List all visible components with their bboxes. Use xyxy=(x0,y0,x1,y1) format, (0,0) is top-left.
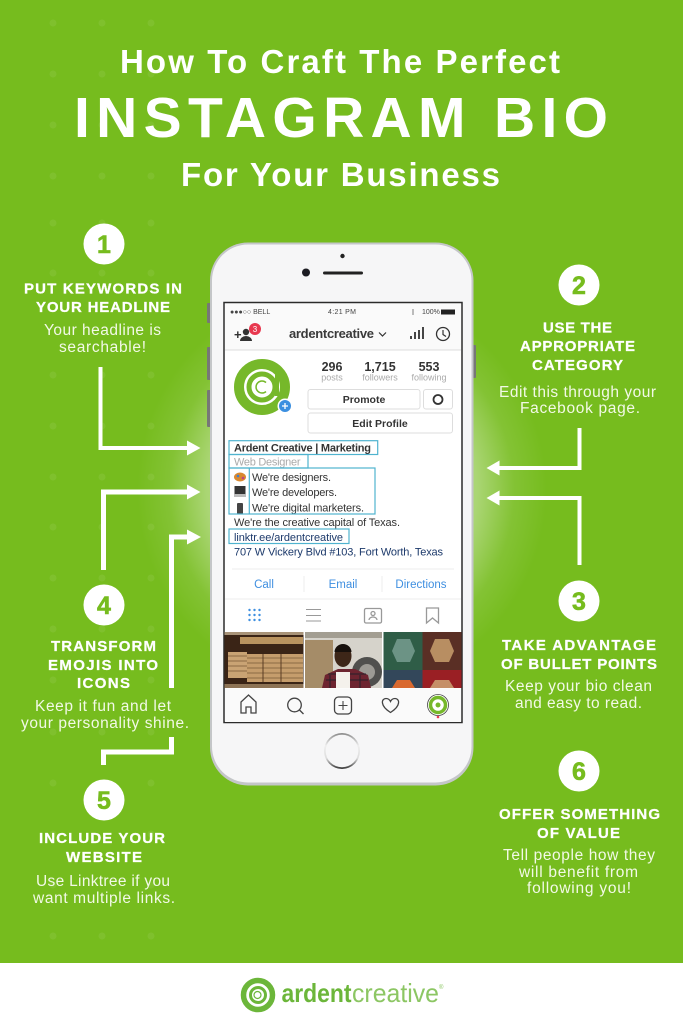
step 1: keywords: Your headline is xyxy=(44,322,161,339)
step 2: category: Facebook page. xyxy=(520,400,640,417)
step 6: value: 6 xyxy=(572,758,586,786)
callout boxes xyxy=(229,441,378,544)
bio text: Web Designer xyxy=(234,456,301,468)
step 5: website xyxy=(32,780,175,907)
logo mark xyxy=(244,980,272,1010)
contact row: Directions xyxy=(395,579,447,591)
bio text xyxy=(234,442,444,558)
logo: creative xyxy=(352,978,439,1008)
logo wordmark: ardent xyxy=(282,978,352,1008)
step 5: website: Use Linktree if you xyxy=(36,873,170,890)
bottom navigation xyxy=(225,688,461,722)
profile buttons: Promote xyxy=(343,394,385,406)
front camera and speaker xyxy=(302,254,363,276)
tab icons xyxy=(248,608,438,623)
step 6: value: will benefit from xyxy=(518,864,638,881)
bio text: linktr.ee/ardentcreative xyxy=(234,532,343,544)
photo: badges xyxy=(384,632,462,688)
step 4: emojis: EMOJIS INTO xyxy=(48,657,158,674)
step 4: emojis: TRANSFORM xyxy=(51,638,156,655)
step 2: category: CATEGORY xyxy=(532,357,623,374)
step 2: category: 2 xyxy=(572,272,586,300)
step 6: value: OF VALUE xyxy=(537,825,620,842)
step 1: keywords: YOUR HEADLINE xyxy=(36,299,170,316)
bio text: We're the creative capital of Texas. xyxy=(234,517,400,529)
step 4: emojis: 4 xyxy=(97,592,111,620)
step 3: bullet points xyxy=(501,580,657,712)
contact row: Call xyxy=(254,579,274,591)
stats: following xyxy=(411,372,447,382)
footer band xyxy=(0,963,683,1024)
title: INSTAGRAM BIO xyxy=(74,86,608,150)
step 5: website: WEBSITE xyxy=(66,849,142,866)
step 2: category: Edit this through your xyxy=(499,384,656,401)
avatar xyxy=(239,364,292,414)
step 3: bullet points: and easy to read. xyxy=(515,695,642,712)
arrow: step 2 to category xyxy=(486,428,580,476)
stats: 1,715 xyxy=(364,360,396,374)
step 4: emojis xyxy=(21,584,189,732)
step 1: keywords xyxy=(24,224,182,356)
logo xyxy=(244,978,444,1010)
glow behind phone xyxy=(137,285,547,695)
step 5: website: 5 xyxy=(97,787,111,815)
step 4: emojis: your personality shine. xyxy=(21,715,189,732)
phone body xyxy=(210,242,474,786)
bio text: 707 W Vickery Blvd #103, Fort Worth, Texas xyxy=(234,546,444,558)
step 3: bullet points: OF BULLET POINTS xyxy=(501,656,657,673)
step 1: keywords: searchable! xyxy=(59,339,146,356)
logo: ® xyxy=(439,984,444,991)
step 6: value xyxy=(499,750,660,897)
step 2: category xyxy=(499,264,656,417)
step 6: value: Tell people how they xyxy=(503,847,655,864)
arrow: step 3 to bullet points xyxy=(486,490,580,565)
step 5: website: want multiple links. xyxy=(32,890,175,907)
step 4: emojis: ICONS xyxy=(77,675,130,692)
profile header: 3 xyxy=(253,325,258,334)
bio text: We're digital marketers. xyxy=(252,502,364,514)
status bar: 100% xyxy=(422,309,440,316)
stats: 296 xyxy=(322,360,342,374)
arrow: step 5 to link xyxy=(104,530,201,765)
step 6: value: following you! xyxy=(527,880,631,897)
stats: posts xyxy=(321,372,343,382)
bio text: We're developers. xyxy=(252,487,337,499)
arrow: step 4 to emojis xyxy=(104,484,200,570)
screen xyxy=(224,302,462,722)
profile buttons xyxy=(308,390,452,433)
dotted pattern xyxy=(50,20,154,940)
contact row xyxy=(225,569,461,599)
photo: lumber xyxy=(224,632,304,688)
title xyxy=(74,43,608,193)
side buttons xyxy=(207,303,476,427)
home button xyxy=(324,733,360,769)
stats: 553 xyxy=(419,360,439,374)
step 3: bullet points: Keep your bio clean xyxy=(505,678,652,695)
step 2: category: USE THE xyxy=(543,320,612,336)
photo grid xyxy=(224,632,462,688)
contact row: Email xyxy=(329,579,357,591)
title: For Your Business xyxy=(181,156,500,193)
title: How To Craft The Perfect xyxy=(120,43,560,80)
bio text: We're designers. xyxy=(252,472,331,484)
status bar xyxy=(225,304,461,318)
phone xyxy=(207,242,476,786)
profile header: + xyxy=(234,327,242,342)
profile header xyxy=(225,318,461,350)
step 2: category: APPROPRIATE xyxy=(520,338,635,355)
step 3: bullet points: 3 xyxy=(572,588,586,616)
profile header: ardentcreative xyxy=(289,326,374,341)
step 3: bullet points: TAKE ADVANTAGE xyxy=(502,637,656,654)
photo: man xyxy=(305,632,382,688)
step 1: keywords: 1 xyxy=(97,231,111,259)
bio text: Ardent Creative | Marketing xyxy=(234,442,371,454)
emoji icons xyxy=(234,472,246,514)
step 6: value: OFFER SOMETHING xyxy=(499,806,660,823)
arrow: step 1 to headline xyxy=(100,367,200,456)
status bar: 4:21 PM xyxy=(328,309,356,316)
step 4: emojis: Keep it fun and let xyxy=(35,698,172,715)
step 1: keywords: PUT KEYWORDS IN xyxy=(24,280,182,298)
step 5: website: INCLUDE YOUR xyxy=(39,830,165,847)
status bar: ●●●○○ BELL xyxy=(230,309,270,316)
stats: followers xyxy=(362,372,398,382)
stats xyxy=(321,360,447,382)
profile buttons: Edit Profile xyxy=(352,418,408,430)
